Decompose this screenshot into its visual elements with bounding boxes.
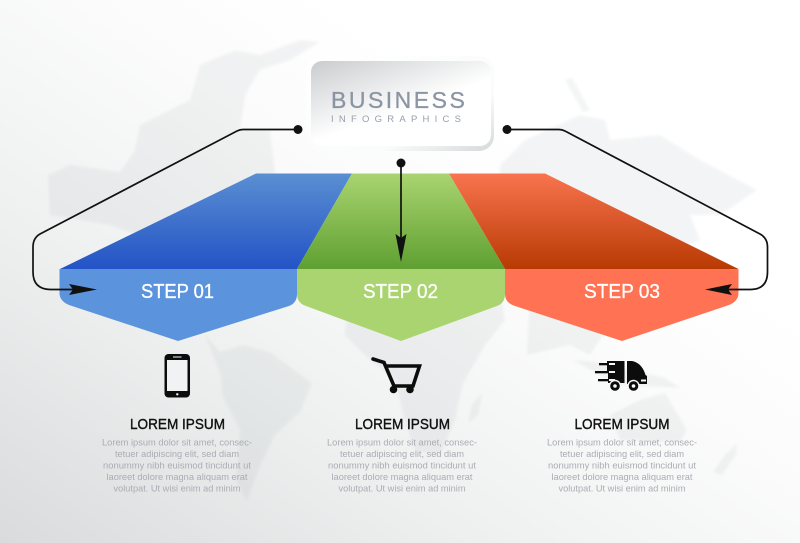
column 3 body: nonummy nibh euismod tincidunt ut	[548, 460, 696, 471]
panel: step 02	[297, 174, 505, 341]
column 2 body: Lorem ipsum dolor sit amet, consec-	[327, 437, 477, 448]
column 1 body: Lorem ipsum dolor sit amet, consec-	[102, 437, 252, 448]
column 2 body: laoreet dolore magna aliquam erat	[332, 472, 473, 483]
text block: column 3	[547, 416, 697, 494]
column 1 body: tetuer adipiscing elit, sed diam	[115, 449, 239, 460]
step 01 tab	[60, 269, 297, 341]
column 1 body: nonummy nibh euismod tincidunt ut	[103, 460, 251, 471]
step 01 label: STEP 01	[141, 281, 214, 303]
world map backdrop	[48, 40, 757, 502]
step 02 top face	[297, 174, 505, 269]
arrow: title to step 01	[33, 125, 302, 295]
text block: column 2	[327, 416, 477, 494]
icon: shopping cart	[373, 359, 420, 393]
text block: column 1	[102, 416, 252, 494]
column 2 body: volutpat. Ut wisi enim ad minim	[338, 484, 466, 494]
column 2 body: tetuer adipiscing elit, sed diam	[340, 449, 464, 460]
icon: smartphone	[164, 354, 190, 398]
title card	[306, 56, 494, 151]
column 3 body: tetuer adipiscing elit, sed diam	[560, 449, 684, 460]
column 3 body	[547, 437, 697, 494]
column 1 heading: LOREM IPSUM	[130, 416, 225, 433]
step 03 label: STEP 03	[584, 281, 660, 303]
column 2 body	[327, 437, 477, 494]
panel: step 01	[60, 174, 352, 341]
column 3 body: volutpat. Ut wisi enim ad minim	[558, 484, 686, 494]
arrow: title to step 02	[396, 158, 406, 262]
column 1 body: laoreet dolore magna aliquam erat	[106, 472, 248, 483]
step 03 top face	[449, 174, 738, 269]
card outer frame	[306, 56, 494, 151]
column 2 heading: LOREM IPSUM	[355, 416, 450, 433]
column 1 body: volutpat. Ut wisi enim ad minim	[114, 484, 241, 494]
step 02 label: STEP 02	[363, 281, 438, 303]
step 02 tab	[297, 269, 505, 341]
column 3 body: laoreet dolore magna aliquam erat	[552, 472, 693, 483]
column 3 body: Lorem ipsum dolor sit amet, consec-	[547, 437, 697, 448]
subtitle: INFOGRAPHICS	[331, 114, 461, 125]
column 1 body	[102, 437, 252, 494]
icon: delivery truck	[595, 361, 647, 392]
step 03 tab	[505, 269, 738, 341]
panel: step 03	[449, 174, 738, 341]
title: BUSINESS	[331, 87, 467, 113]
arrow: title to step 03	[502, 125, 768, 295]
column 3 heading: LOREM IPSUM	[574, 416, 670, 433]
step 01 top face	[60, 174, 352, 269]
column 2 body: nonummy nibh euismod tincidunt ut	[328, 460, 476, 471]
card inner face	[311, 61, 491, 146]
